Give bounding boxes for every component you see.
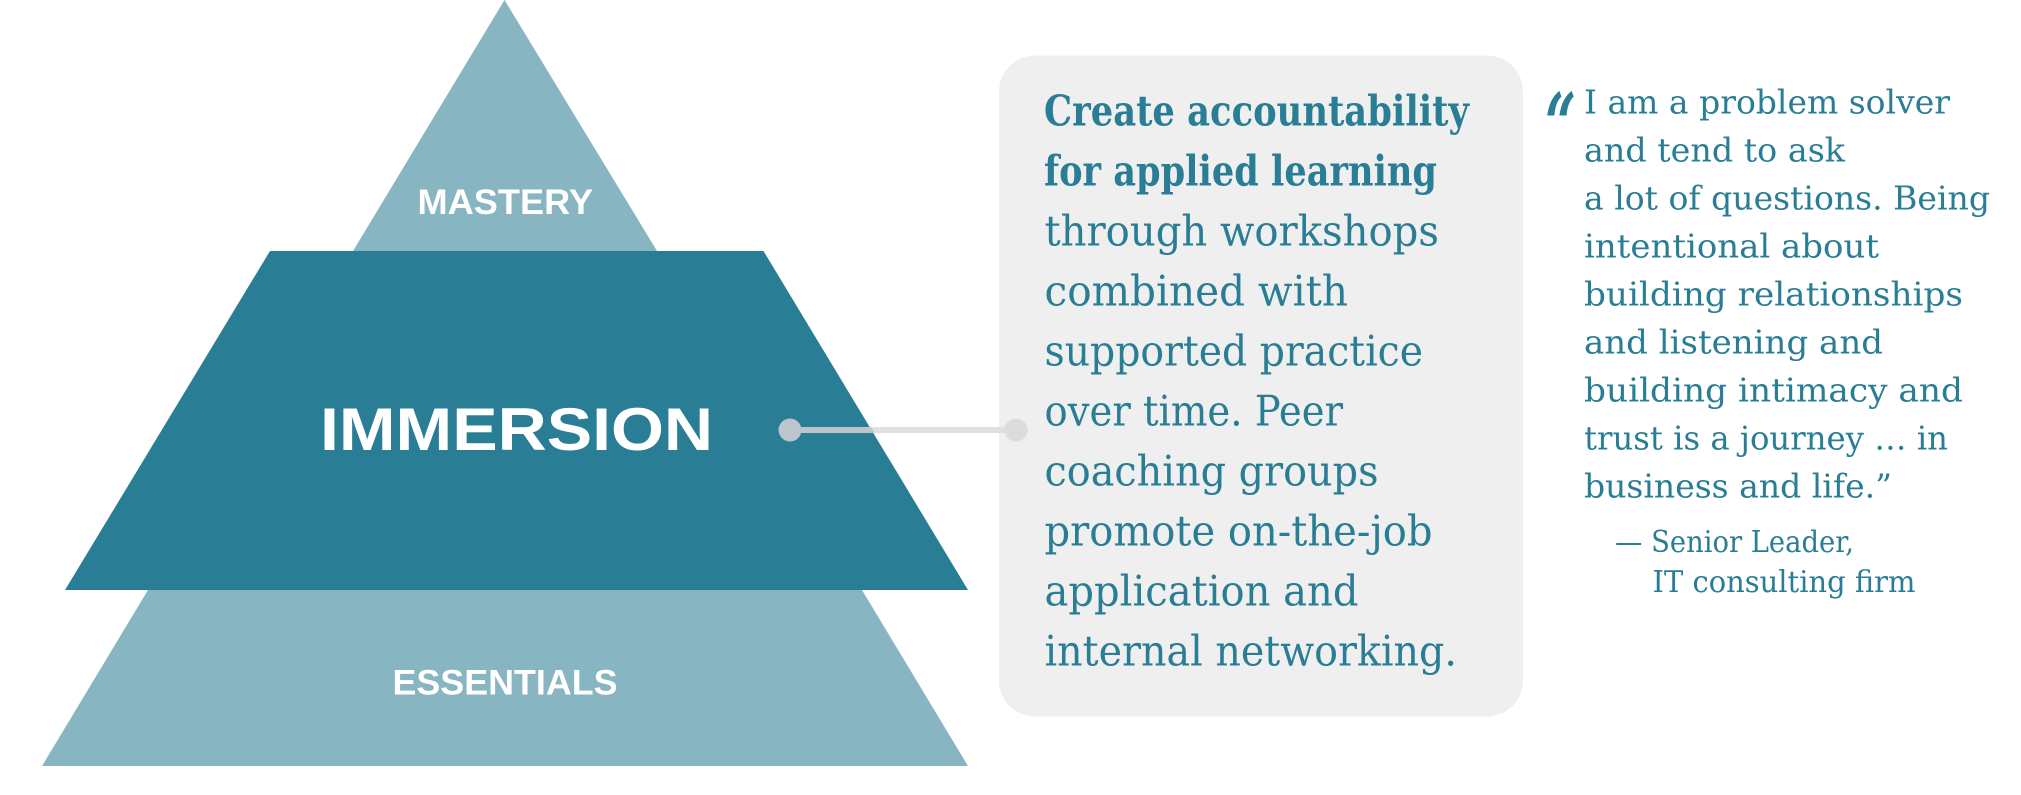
body copy: supported practice <box>1044 326 1423 376</box>
body copy: application and <box>1044 566 1358 616</box>
pyramid diagram <box>42 0 968 766</box>
text block: quote: building relationships <box>1584 274 1963 314</box>
panel: description card <box>999 56 1523 716</box>
body copy: through workshops <box>1044 206 1439 256</box>
pyramid tier: immersion <box>65 251 968 590</box>
text block: quote: and listening and <box>1584 322 1883 362</box>
body copy: coaching groups <box>1044 446 1378 496</box>
text block: description <box>1044 86 1470 676</box>
text block: quote: I am a problem solver <box>1584 82 1950 122</box>
text block: quote <box>1584 82 1990 506</box>
label: immersion: IMMERSION <box>320 396 713 463</box>
body copy: promote on-the-job <box>1044 506 1432 556</box>
text block: attribution <box>1615 525 1916 600</box>
text block: attribution: — Senior Leader, <box>1615 525 1854 560</box>
body copy: combined with <box>1044 266 1348 316</box>
text block: quote: trust is a journey … in <box>1584 418 1948 458</box>
body copy: over time. Peer <box>1044 386 1344 436</box>
text block: quote: a lot of questions. Being <box>1584 178 1990 218</box>
label: essentials: ESSENTIALS <box>392 664 618 702</box>
label: mastery: MASTERY <box>418 183 593 222</box>
text block: quote: intentional about <box>1584 226 1879 266</box>
text block: quote: and tend to ask <box>1584 130 1846 170</box>
text block: quote: business and life.” <box>1584 466 1892 506</box>
bold lead-in: for applied learning <box>1044 146 1437 196</box>
bold lead-in: Create accountability <box>1044 86 1470 136</box>
connector line with end dots <box>778 418 1028 442</box>
body copy: internal networking. <box>1044 626 1457 676</box>
body copy <box>1044 206 1457 676</box>
text block: quote: building intimacy and <box>1584 370 1963 410</box>
icon: opening quotation mark: “ <box>1545 75 1576 176</box>
text block: attribution: IT consulting firm <box>1652 565 1916 600</box>
pyramid tier: mastery <box>353 0 657 251</box>
bold lead-in <box>1044 86 1470 196</box>
pyramid tier: essentials <box>42 590 968 766</box>
